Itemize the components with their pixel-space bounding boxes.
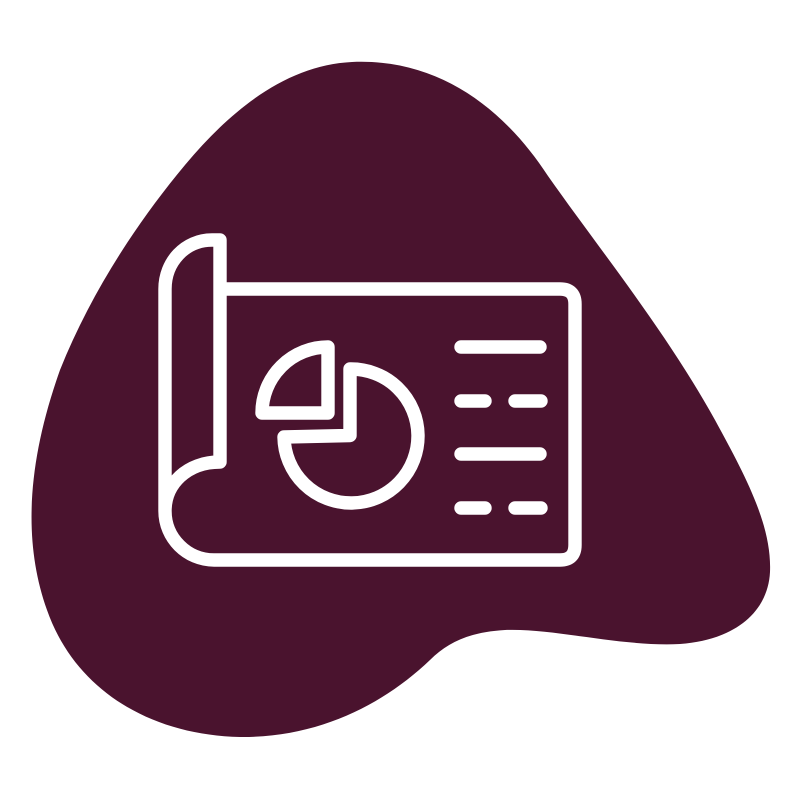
background blob	[32, 62, 770, 737]
pie chart small slice	[262, 347, 328, 413]
icon: report scroll with pie chart	[165, 240, 575, 560]
text lines	[461, 347, 541, 508]
pie chart large slice	[284, 369, 418, 503]
scroll sheet outline	[165, 240, 575, 560]
